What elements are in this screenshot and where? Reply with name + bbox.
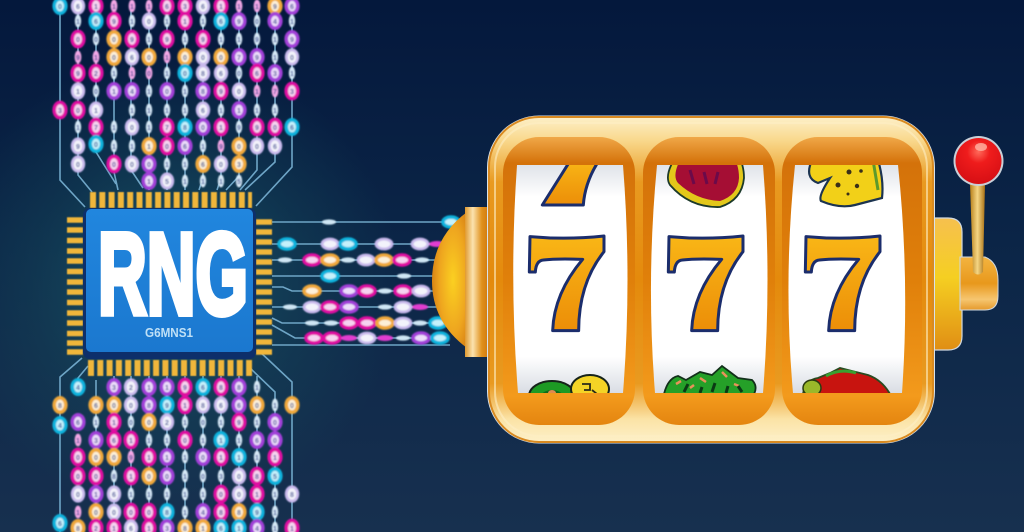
column 9 bottom: 680100141 <box>201 385 205 532</box>
column 12 top: 109961190 <box>255 4 259 151</box>
column 4 bottom: 301608601 <box>112 385 116 532</box>
data stream beads flowing to the slot machine <box>278 217 459 343</box>
column 1 top <box>54 0 66 118</box>
column 4 bottom <box>108 380 120 532</box>
column 13 bottom <box>269 399 281 532</box>
column 9 top <box>197 0 209 187</box>
stream row 7 <box>305 318 446 328</box>
stream row 6 <box>283 302 428 312</box>
column 12 top <box>251 0 263 153</box>
column 12 bottom <box>251 381 263 532</box>
column 13 top <box>269 0 281 153</box>
column 2 bottom: 46100018 <box>76 385 80 532</box>
column 7 bottom <box>161 380 173 532</box>
reel 3 window <box>788 165 905 393</box>
column 13 bottom: 10015111 <box>273 403 277 532</box>
column 1 bottom <box>54 398 66 530</box>
column 1 top: 03 <box>58 4 62 115</box>
RNG chip <box>67 200 272 368</box>
stream row 5 <box>304 286 429 296</box>
reel 1 window <box>513 165 628 393</box>
stream row 1 <box>322 217 459 227</box>
stream row 2 <box>279 239 445 249</box>
column 10 top <box>215 0 227 187</box>
chip body <box>83 208 256 359</box>
column 11 bottom <box>233 380 245 532</box>
reel 2 red symbol at top <box>667 165 745 208</box>
column 12 bottom: 101618194 <box>255 385 259 532</box>
column 5 bottom: 200191106 <box>129 385 133 532</box>
column 3 top <box>90 0 102 151</box>
column 13 top: 941137106 <box>273 4 277 151</box>
column 3 bottom <box>90 398 102 532</box>
reel 2 window <box>651 165 768 393</box>
reel 1 main seven <box>529 236 604 331</box>
reel 1 partial seven at top <box>542 160 599 205</box>
lever rod <box>970 184 985 274</box>
data stream traces to the slot machine <box>272 222 450 345</box>
reel 2 frame <box>643 137 775 425</box>
lever base <box>960 257 998 310</box>
reel 3 <box>782 137 922 425</box>
column 4 top <box>108 0 120 172</box>
column 14 top <box>286 0 298 134</box>
random digit beads above the chip <box>54 0 298 188</box>
stream row 8 <box>306 333 448 343</box>
random digit beads below the chip <box>54 379 298 532</box>
chip face <box>86 209 253 352</box>
stream row 4 <box>322 271 411 281</box>
column 2 top: 6109910190 <box>76 4 80 169</box>
column 5 top <box>126 0 138 171</box>
reel 2 green symbol at bottom <box>664 366 756 394</box>
reel 2 main seven <box>668 236 743 331</box>
column 9 bottom <box>197 380 209 532</box>
column 3 top: 160120170 <box>94 4 98 149</box>
lever <box>954 136 1004 310</box>
reel 1 frame <box>503 137 635 425</box>
reel 3 cheese symbol at top <box>809 160 882 206</box>
RNG label: RNG <box>98 209 248 339</box>
column 14 bottom: 081 <box>290 403 294 532</box>
chip sublabel: G6MNS1 <box>145 325 193 340</box>
column 10 bottom: 861113086 <box>219 385 223 532</box>
reel 2 <box>643 137 775 425</box>
column 14 top: 6190136 <box>290 4 294 132</box>
column 6 bottom <box>143 380 155 532</box>
column 6 top <box>143 0 155 188</box>
column 1 bottom: 846 <box>58 403 62 528</box>
column 8 bottom <box>179 379 191 532</box>
column 7 bottom: 192110183 <box>165 385 169 532</box>
column 2 bottom <box>72 380 84 532</box>
column 5 top: 1196141010 <box>130 4 134 169</box>
column 4 top: 190011110 <box>112 4 116 169</box>
column 10 top: 16106911901 <box>219 4 223 186</box>
column 14 bottom <box>286 398 298 532</box>
column 11 bottom: 869110081 <box>237 385 241 532</box>
reel 1 <box>503 137 635 425</box>
reel 1 fruit symbols at bottom <box>528 374 610 393</box>
reel 3 main seven <box>805 236 880 331</box>
column 5 bottom <box>125 380 137 532</box>
slot machine right side housing <box>932 218 962 350</box>
column 8 bottom: 911011118 <box>183 385 187 532</box>
slot machine body <box>487 116 935 444</box>
column 11 top <box>233 0 245 187</box>
column 11 top: 19170019035 <box>237 4 241 186</box>
column 9 top: 61908860161 <box>201 4 205 186</box>
column 7 top <box>161 0 173 188</box>
circuit traces below the chip <box>60 350 292 532</box>
stream row 3 <box>278 255 429 265</box>
column 8 top: 31100118611 <box>183 4 187 186</box>
slot machine left dome connector <box>432 207 491 357</box>
column 6 bottom: 180110101 <box>147 385 151 532</box>
column 2 top <box>72 0 84 171</box>
reel 3 frame <box>782 137 922 425</box>
column 7 top: 61911017015 <box>165 4 169 186</box>
column 10 bottom <box>215 379 227 532</box>
lever ball <box>954 136 1004 186</box>
reel 3 red symbol at bottom <box>803 368 890 396</box>
column 6 top: 10100111101 <box>147 4 151 186</box>
column 3 bottom: 61300102 <box>94 403 98 532</box>
column 8 top <box>179 0 191 187</box>
circuit traces above the chip <box>60 6 292 207</box>
chip pins <box>67 200 272 368</box>
